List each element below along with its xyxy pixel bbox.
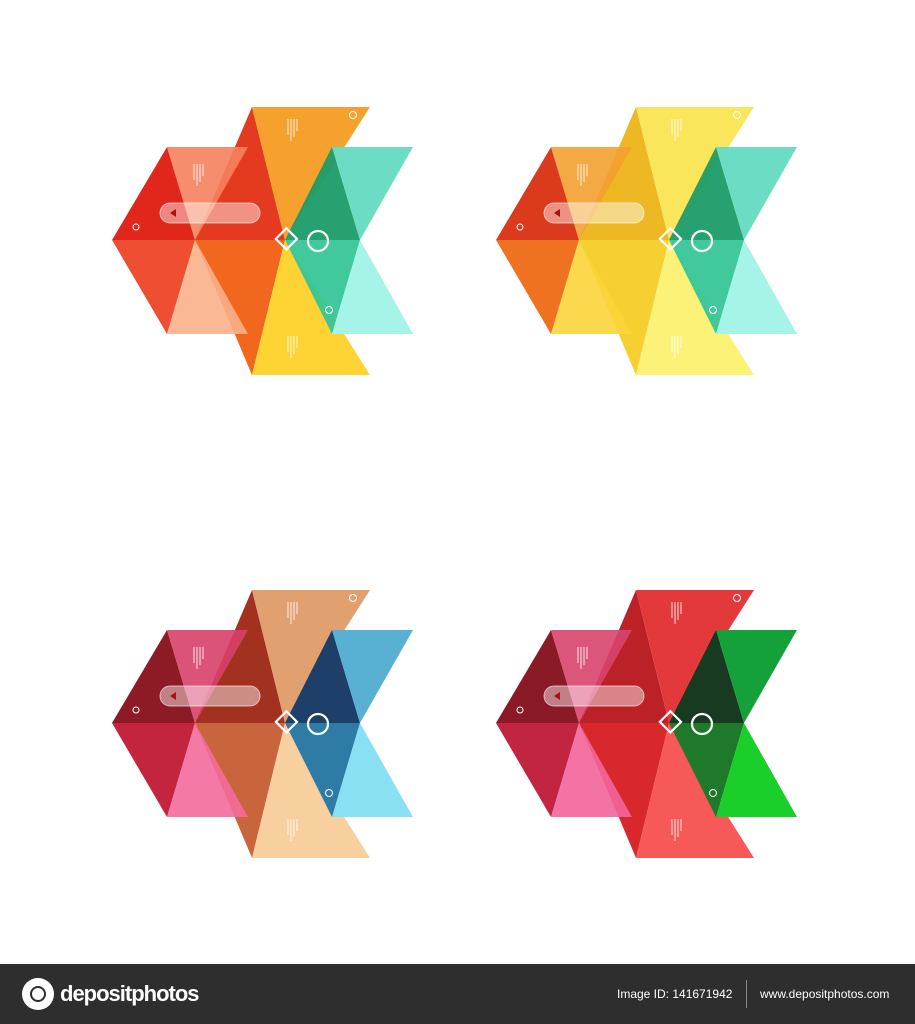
infographic 2: orange-yellow-green arrow <box>496 107 797 375</box>
website: www.depositphotos.com <box>760 987 889 1001</box>
infographic 1: red-orange-green arrow <box>112 107 413 375</box>
infographic 3: crimson-brown-blue arrow <box>112 590 413 858</box>
icon: camera <box>22 978 54 1010</box>
image id: Image ID: 141671942 <box>617 987 732 1001</box>
logo: depositphotos <box>60 981 199 1006</box>
logo <box>22 978 199 1010</box>
infographic 4: crimson-red-green arrow <box>496 590 797 858</box>
footer bar <box>0 964 915 1024</box>
